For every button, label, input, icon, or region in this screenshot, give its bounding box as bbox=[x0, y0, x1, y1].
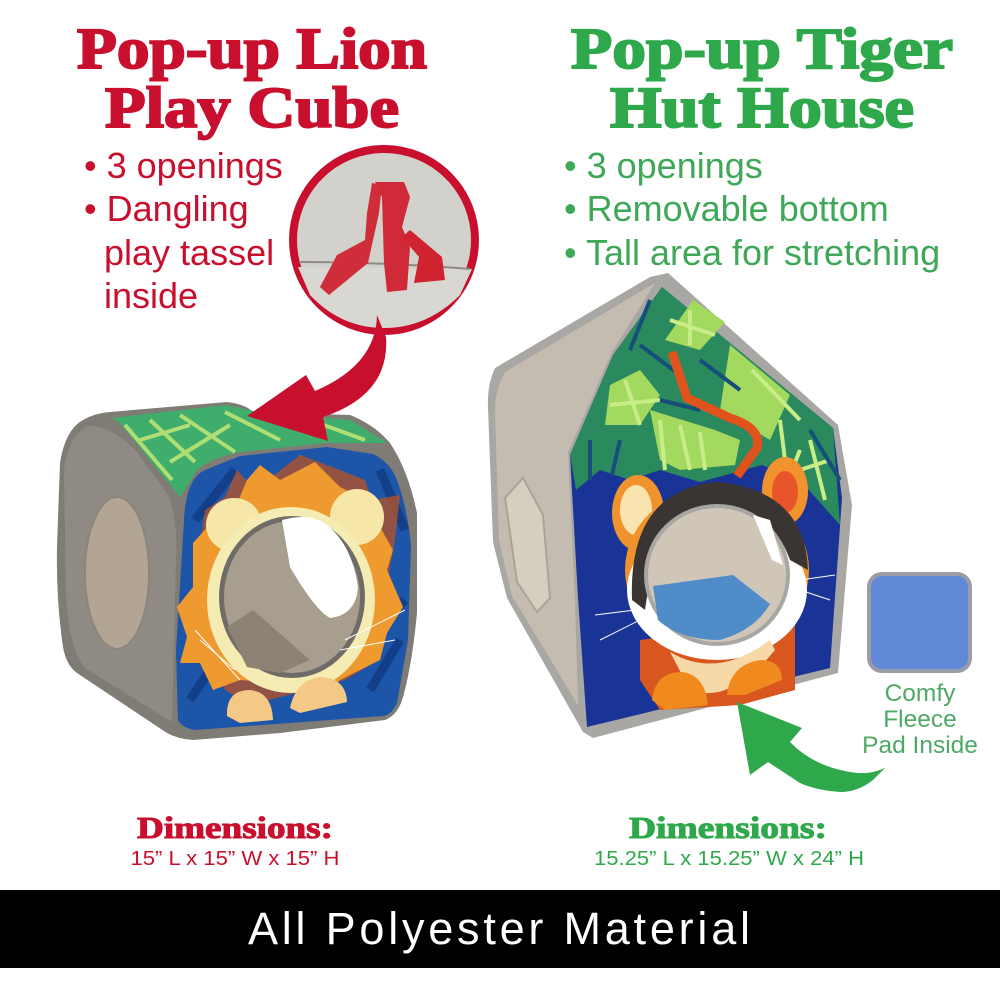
lion mane bbox=[190, 455, 400, 705]
title: tiger hut house bbox=[571, 16, 953, 140]
fleece pad caption bbox=[862, 680, 978, 759]
lion feature list: • Dangling bbox=[84, 188, 249, 229]
side opening bbox=[85, 497, 149, 649]
tiger tail bbox=[672, 352, 758, 476]
tiger whiskers bbox=[595, 575, 835, 640]
material banner: All Polyester Material bbox=[248, 903, 750, 954]
lion paws bbox=[227, 677, 347, 723]
fleece pad caption: Comfy bbox=[885, 680, 956, 707]
title: tiger hut house: Hut House bbox=[610, 75, 914, 140]
lion feature list: play tassel bbox=[104, 232, 274, 273]
title: lion play cube bbox=[77, 16, 427, 140]
tiger hut product bbox=[488, 273, 852, 738]
title: lion play cube: Play Cube bbox=[105, 75, 399, 140]
tiger feature list: • 3 openings bbox=[564, 145, 763, 186]
tiger dimensions: Dimensions: bbox=[629, 810, 827, 845]
tiger feature list: • Removable bottom bbox=[564, 188, 889, 229]
tiger opening bbox=[644, 504, 790, 646]
lion dimensions: 15” L x 15” W x 15” H bbox=[130, 848, 340, 870]
tiger feature list bbox=[564, 145, 940, 273]
tiger dimensions: 15.25” L x 15.25” W x 24” H bbox=[594, 848, 864, 870]
side opening bbox=[505, 478, 550, 612]
title: tiger hut house: Pop-up Tiger bbox=[571, 16, 953, 81]
fleece pad caption: Fleece bbox=[883, 706, 957, 733]
tassel detail callout bbox=[293, 149, 475, 331]
title: lion play cube: Pop-up Lion bbox=[77, 16, 427, 81]
tiger feature list: • Tall area for stretching bbox=[564, 232, 940, 273]
tiger ears bbox=[612, 475, 664, 551]
lion cube product bbox=[57, 402, 417, 740]
hut side panel bbox=[495, 283, 655, 705]
lion dimensions bbox=[130, 810, 340, 870]
cube top jungle print bbox=[112, 405, 387, 497]
opening bbox=[219, 516, 365, 678]
material banner bbox=[0, 890, 1000, 968]
lion face ring bbox=[207, 507, 375, 693]
fleece pad caption: Pad Inside bbox=[862, 732, 978, 759]
tiger paws bbox=[652, 660, 782, 710]
tiger dimensions bbox=[594, 810, 864, 870]
fleece pad bbox=[869, 574, 970, 671]
red arrow bbox=[247, 315, 386, 441]
lion whiskers bbox=[195, 610, 405, 680]
hut front blue panel bbox=[570, 287, 842, 727]
green arrow bbox=[737, 702, 885, 792]
lion feature list: inside bbox=[104, 275, 198, 316]
jungle foliage bbox=[570, 287, 840, 525]
lion ears bbox=[206, 498, 262, 552]
lion feature list bbox=[84, 145, 283, 316]
tiger head ring bbox=[625, 482, 809, 693]
lion dimensions: Dimensions: bbox=[137, 810, 333, 845]
lion feature list: • 3 openings bbox=[84, 145, 283, 186]
cube front blue panel bbox=[176, 447, 411, 730]
cube side panel bbox=[64, 426, 176, 722]
tiger body bbox=[640, 620, 795, 710]
